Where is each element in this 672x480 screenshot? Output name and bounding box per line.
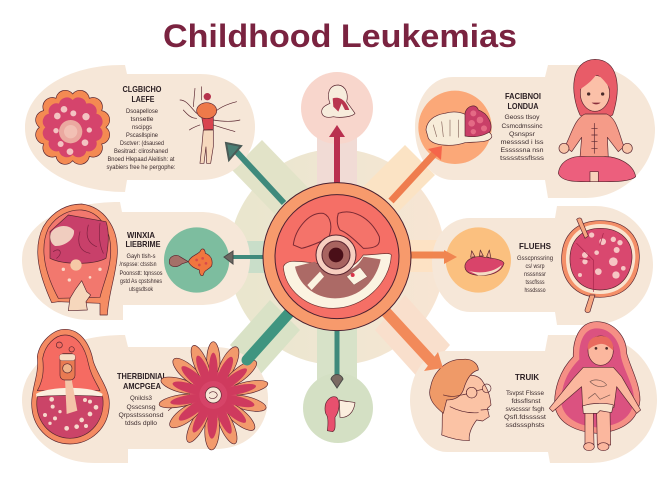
arrow: up red <box>329 125 345 186</box>
panel: top left <box>25 65 255 192</box>
icon: child in pink pod <box>549 322 641 451</box>
arrow: left teal <box>224 251 264 264</box>
panel: top right <box>415 59 655 198</box>
text block <box>517 255 553 294</box>
icon: seated girl <box>558 59 636 182</box>
heading: CLGBICHO <box>122 84 162 94</box>
text block: Gayh tlsh-s <box>126 253 156 260</box>
text block: /nspsse: ctsstsn <box>120 261 157 268</box>
text block: fdssflsnst <box>512 398 541 405</box>
icon: man's head with glasses <box>430 359 491 441</box>
text block <box>106 108 176 171</box>
text block: Dsoapellose <box>126 108 158 115</box>
halo and spoke bands <box>200 100 470 400</box>
heading: AMCPGEA <box>123 381 161 391</box>
lungs <box>293 212 380 248</box>
panel: middle left <box>22 202 250 320</box>
text block: cs/ wsrp <box>526 263 545 270</box>
text block <box>500 114 544 162</box>
icon: marrow cross-section arch <box>38 204 117 315</box>
arrow: lower-left teal <box>247 312 290 360</box>
text block: utsgsdtsok <box>129 286 154 293</box>
text block: Gsscpnssring <box>517 255 553 262</box>
panel: bottom right <box>410 322 657 463</box>
circle: bottom green icon <box>303 373 373 443</box>
text block: syabiers free he pergophe: <box>106 164 176 171</box>
arrow: right orange <box>410 250 457 264</box>
text block: nscipgs <box>132 124 152 131</box>
heading: LONDUA <box>508 101 538 111</box>
text block <box>120 253 162 293</box>
arrow: up-left teal <box>226 143 284 203</box>
arrow: down teal <box>331 328 343 388</box>
text block: Dsctver: (dsaused <box>120 140 164 147</box>
text block: tdsds dpllo <box>125 420 157 427</box>
heading <box>122 84 162 104</box>
text block: Qsscsnsg <box>126 404 156 411</box>
crescent <box>283 254 391 308</box>
panel: middle right <box>432 206 653 325</box>
panel: bottom left <box>22 329 269 463</box>
arrow: up-right orange <box>391 146 442 201</box>
text block: Geoss tlsoy <box>504 114 540 121</box>
heading <box>505 91 541 111</box>
text block: svscsssr fsgh <box>506 406 545 413</box>
icon: red flower cell <box>158 342 269 450</box>
text block: Bnoed Hlepaad Aleitish: at <box>108 156 175 163</box>
circle: orange organ icon <box>446 227 511 293</box>
text block: gstd As cpstshnes <box>120 278 162 285</box>
icon: bone marrow flask <box>32 329 109 444</box>
circle: green organ icon <box>164 227 229 293</box>
title: Childhood Leukemias <box>163 18 517 54</box>
arrow: lower-right orange <box>386 312 443 371</box>
text block: Esssssna nsn <box>500 147 544 154</box>
text block: Csmcdmssinc <box>502 123 543 130</box>
text block: ssdsssphsts <box>506 422 544 429</box>
text block: tsssstssflsss <box>500 155 544 162</box>
text block: tsscflsss <box>526 279 544 286</box>
text block: Qsfl.fdssssst <box>504 414 546 421</box>
heading <box>126 230 161 249</box>
heading: WINXIA <box>127 230 155 240</box>
heading: LIEBRIME <box>126 239 161 249</box>
text block: tsnsetle <box>130 116 154 123</box>
heading: THERBIDNIAL <box>117 371 167 381</box>
text block: Poonsstt: tqnssos <box>120 270 162 277</box>
central eye <box>316 235 356 275</box>
central hub <box>263 183 411 331</box>
text block: messssd i lss <box>500 139 544 146</box>
icon: figure with radiating lines <box>180 87 240 163</box>
text block: hssdssso <box>524 287 546 294</box>
text block <box>118 395 164 427</box>
text block <box>504 390 546 429</box>
text block: Tsvpst Flssse <box>506 390 544 397</box>
text block: Pscasllspine <box>126 132 158 139</box>
heading: LAEFE <box>132 94 155 104</box>
icon: large marrow cell <box>562 218 639 313</box>
heading: FACIBNOI <box>505 91 541 101</box>
text block: Qrpsstsssonsd <box>118 412 164 419</box>
circle: orange brain icon <box>418 91 492 164</box>
circle: top pink icon <box>301 72 373 144</box>
text block: Qsnspsr <box>509 131 536 138</box>
text block: Qnilcls3 <box>130 395 152 402</box>
heading: FLUEHS <box>519 241 551 251</box>
heading: TRUIK <box>515 372 540 382</box>
icon: leukemia cell cluster <box>36 90 110 164</box>
text block: nsssnssr <box>524 271 547 278</box>
text block: Besitrad: cliroshaned <box>114 148 168 155</box>
heading <box>117 371 167 391</box>
